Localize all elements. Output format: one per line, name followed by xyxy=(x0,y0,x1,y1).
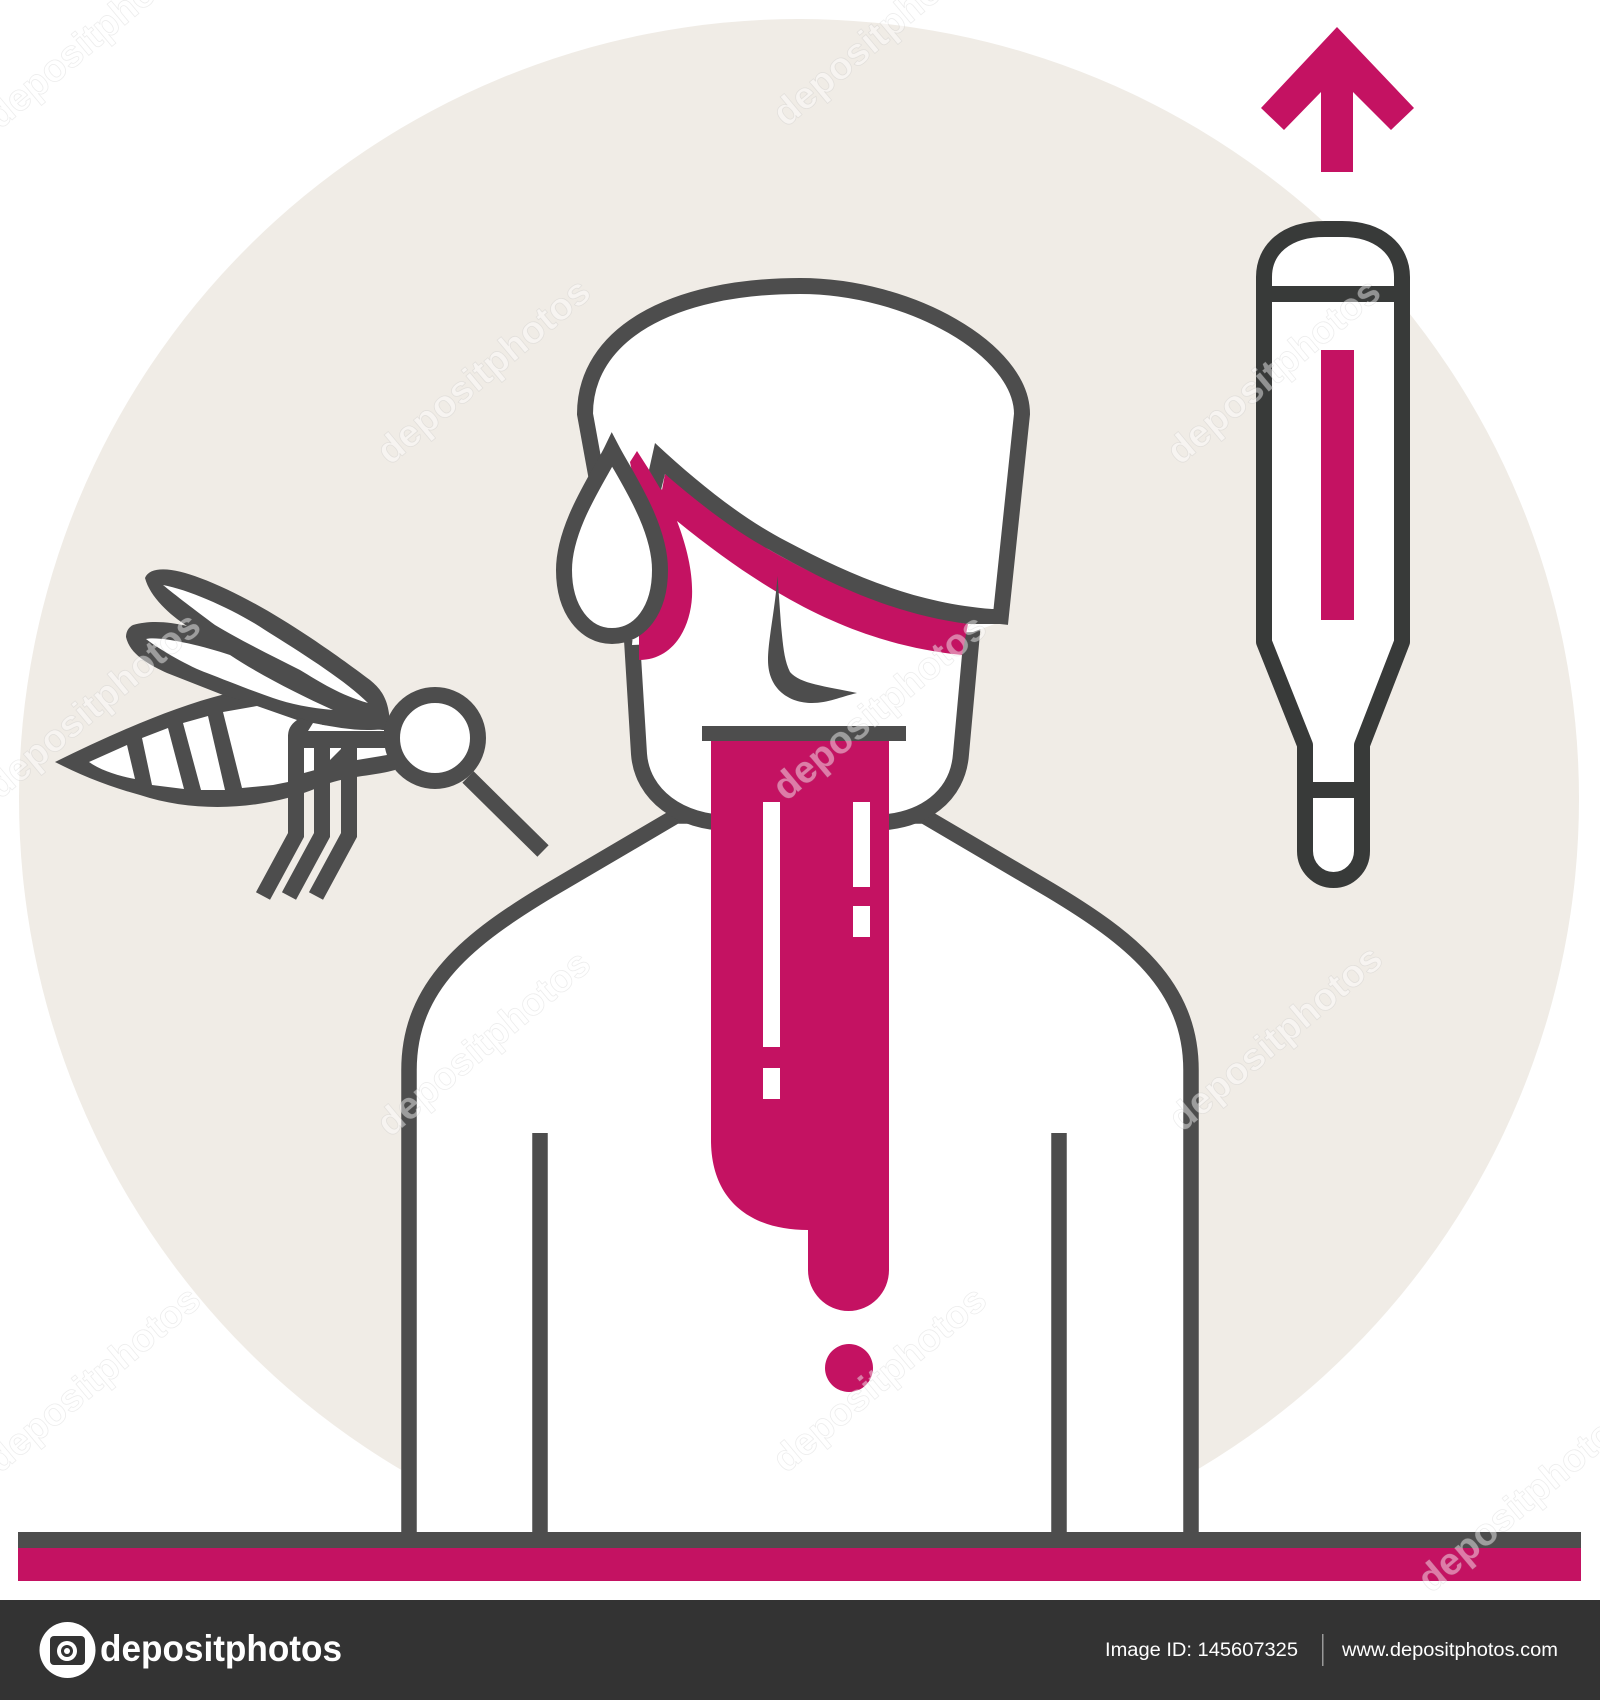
body windows xyxy=(89,706,387,790)
ground bar xyxy=(18,1532,1581,1581)
upper wing window xyxy=(163,585,368,703)
mercury bar xyxy=(1321,350,1354,620)
hair fringe xyxy=(649,443,1006,624)
website url: www.depositphotos.com xyxy=(1341,1640,1558,1661)
hair and upper face fill xyxy=(585,286,1022,645)
mosquito head xyxy=(392,695,478,781)
arrow up xyxy=(1261,27,1414,172)
sweat drop xyxy=(564,450,660,636)
person figure xyxy=(409,286,1191,1540)
mosquito wings silhouette xyxy=(126,569,390,730)
torso with shoulders and arm lines xyxy=(409,816,1191,1540)
lower wing window xyxy=(146,638,333,710)
nose xyxy=(768,576,857,703)
logo icon: camera xyxy=(40,1622,96,1678)
mouth xyxy=(702,726,906,741)
watermarks: depositphotos xyxy=(765,1278,995,1481)
watermarks: depositphotos xyxy=(1161,937,1391,1140)
mosquito xyxy=(55,569,543,896)
watermarks: depositphotos xyxy=(369,270,599,473)
crimson shadow under fringe xyxy=(630,451,968,660)
ground line grey xyxy=(18,1532,1581,1548)
thermometer outline xyxy=(1264,229,1402,880)
proboscis xyxy=(468,777,543,851)
hair outline xyxy=(585,286,1022,624)
thermometer xyxy=(1264,229,1402,880)
blood drop xyxy=(825,1344,873,1392)
logo wordmark: depositphotos xyxy=(100,1628,342,1669)
mosquito body silhouette xyxy=(55,694,395,807)
footer band xyxy=(0,1600,1600,1700)
footer background xyxy=(0,1600,1600,1700)
watermarks: depositphotos xyxy=(1159,270,1389,473)
watermarks: depositphotos xyxy=(765,606,995,809)
face outline xyxy=(632,622,973,823)
footer divider xyxy=(1322,1634,1324,1666)
blood from mouth xyxy=(711,741,889,1311)
image id: Image ID: 145607325 xyxy=(1105,1640,1298,1661)
ground line crimson xyxy=(18,1548,1581,1581)
watermarks: depositphotos xyxy=(369,942,599,1145)
thermometer cap line xyxy=(1264,294,1402,790)
mosquito legs xyxy=(263,735,349,896)
blood highlights xyxy=(763,802,870,1099)
